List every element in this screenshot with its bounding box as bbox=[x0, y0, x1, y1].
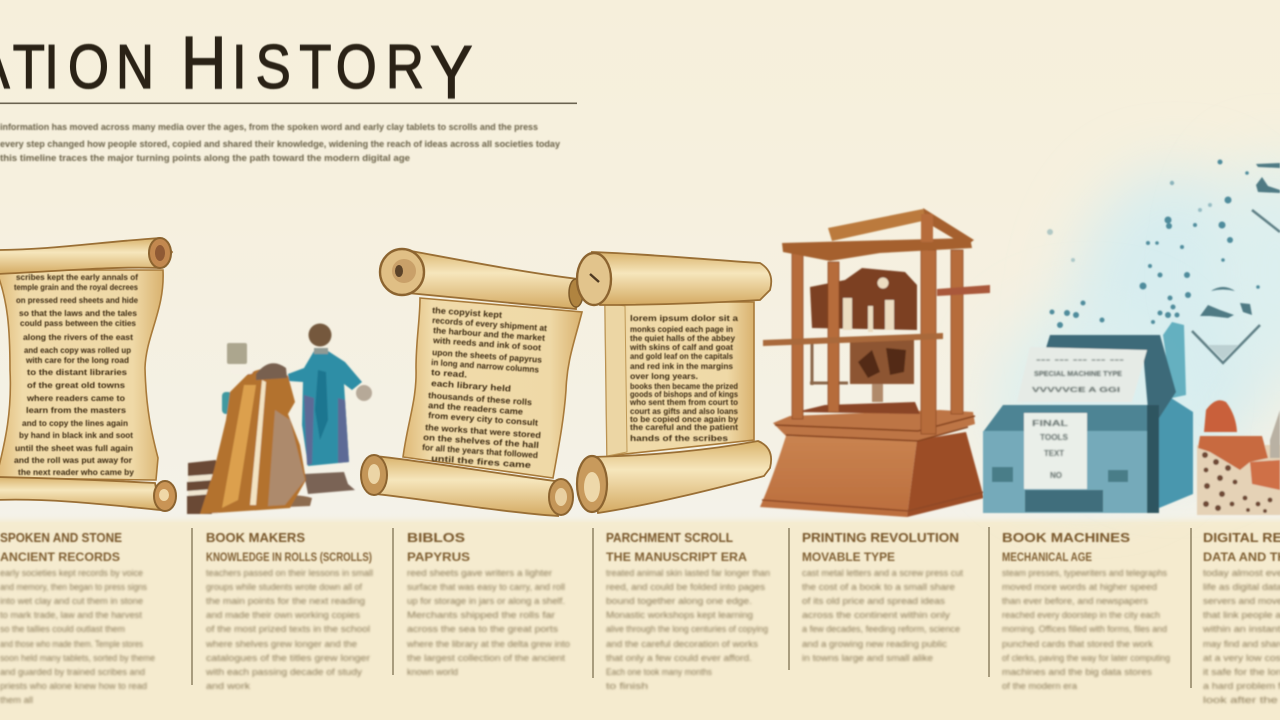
scroll 3 writing: the careful and the patient bbox=[630, 422, 738, 432]
crystal outline bbox=[1192, 325, 1260, 363]
crystal fill bbox=[1197, 326, 1258, 360]
crystal shape bbox=[1192, 287, 1260, 363]
column 2 bbox=[205, 530, 373, 691]
scroll 1 writing: to the distant libraries bbox=[27, 367, 127, 377]
title: N bbox=[116, 33, 154, 102]
scroll 3 writing: monks copied each page in bbox=[630, 324, 733, 334]
column 6 body: of the modern era bbox=[1002, 681, 1077, 691]
column 3 heading bbox=[407, 530, 470, 564]
column 3 body: known world bbox=[407, 667, 458, 677]
press cross bars bbox=[763, 333, 943, 346]
column 5 body: in towns large and small alike bbox=[802, 653, 933, 663]
scroll 3 top roll end bbox=[577, 253, 611, 305]
scroll 3 top roll bbox=[592, 252, 771, 305]
column 1 heading bbox=[0, 530, 122, 564]
column 7 bbox=[1202, 530, 1280, 705]
column 2 heading: BOOK MAKERS bbox=[206, 530, 305, 545]
column 3 body: surface that was easy to carry, and roll bbox=[407, 582, 565, 592]
scroll 1 writing: learn from the masters bbox=[26, 405, 126, 415]
title: T bbox=[13, 33, 45, 102]
scroll 3 writing: books then became the prized bbox=[630, 381, 738, 391]
column 5 body: across the continent within only bbox=[802, 610, 951, 620]
scroll 1 writing: with care for the long road bbox=[25, 355, 129, 365]
column 5 body: cast metal letters and a screw press cut bbox=[802, 568, 964, 578]
column 6 body: of clerks, paving the way for later computing bbox=[1002, 653, 1170, 663]
scroll 2 writing: thousands of these rolls bbox=[428, 390, 533, 407]
column 1 body: to mark trade, law and the harvest bbox=[0, 610, 143, 620]
column 3 bbox=[406, 530, 570, 677]
subtitle text: this timeline traces the major turning points along the path toward the modern digital age bbox=[0, 153, 410, 163]
column 6 heading: MECHANICAL AGE bbox=[1002, 550, 1092, 564]
printing press bbox=[760, 208, 990, 517]
column 1 body: priests who alone knew how to read bbox=[0, 681, 147, 691]
scroll 2 writing: the harbour and the market bbox=[433, 325, 545, 343]
scroll 2 top roll right end bbox=[569, 279, 583, 307]
column 6 body: machines and the big data stores bbox=[1002, 667, 1153, 677]
column 2 body: with each passing decade of study bbox=[205, 667, 363, 677]
title rule bbox=[0, 102, 577, 104]
grey object bbox=[1270, 410, 1280, 458]
press mechanism lower bbox=[850, 338, 914, 384]
title: H bbox=[181, 21, 226, 104]
column 6 body: punched cards that stored the work bbox=[1002, 639, 1154, 649]
upper crystal shape bbox=[1252, 163, 1280, 232]
machine note text: FINAL bbox=[1032, 419, 1068, 428]
machine paper text bbox=[1032, 355, 1125, 394]
scroll 2 bottom roll left end bbox=[361, 455, 387, 495]
title: I bbox=[232, 33, 247, 102]
column 5 body bbox=[802, 568, 964, 663]
column 4 body: bound together along one edge. bbox=[606, 596, 752, 606]
column 2 body: groups while students wrote down all of bbox=[206, 582, 362, 592]
scroll 1 sheet bbox=[0, 270, 163, 480]
column 4 bbox=[606, 530, 770, 691]
machine note text bbox=[1032, 419, 1069, 480]
scroll 3 bottom roll bbox=[590, 441, 771, 513]
brick and tablet stack bbox=[1197, 400, 1280, 515]
scroll 3 writing: goods of bishops and of kings bbox=[630, 389, 738, 399]
scroll 3 writing: to be copied once again by bbox=[630, 414, 738, 424]
column 7 heading bbox=[1203, 530, 1280, 564]
column 5 heading bbox=[802, 530, 959, 564]
scroll 2 writing bbox=[422, 305, 547, 470]
scroll 1 writing: temple grain and the royal decrees bbox=[14, 282, 138, 292]
column 3 body: Merchants shipped the rolls far bbox=[407, 610, 555, 620]
column 3 body: where the library at the delta grew into bbox=[406, 639, 570, 649]
scroll 1 writing: scribes kept the early annals of bbox=[16, 272, 138, 282]
machine cover bbox=[1046, 335, 1176, 432]
column 6 body: moved more words at higher speed bbox=[1002, 582, 1157, 592]
column 5 body: a few decades, feeding reform, science bbox=[802, 624, 960, 634]
scroll 1 writing: along the rivers of the east bbox=[23, 332, 133, 342]
machine note text: TOOLS bbox=[1040, 433, 1069, 442]
column 4 body bbox=[606, 568, 770, 691]
scroll 1 writing: on pressed reed sheets and hide bbox=[16, 295, 138, 305]
scroll 3 bottom roll end bbox=[577, 456, 607, 512]
title: O bbox=[336, 33, 377, 102]
title: T bbox=[299, 33, 331, 102]
scroll 1 writing: the next reader who came by bbox=[18, 467, 134, 477]
column divider 5 bbox=[988, 527, 990, 677]
press base side bbox=[907, 432, 984, 517]
column divider 4 bbox=[788, 528, 790, 670]
column 2 body: and work bbox=[206, 681, 251, 691]
robe folds bbox=[268, 410, 305, 506]
books pile bbox=[187, 460, 218, 514]
column 4 body: reed, and could be folded into pages bbox=[606, 582, 766, 592]
column 5 heading: PRINTING REVOLUTION bbox=[802, 530, 959, 545]
teacher collar bbox=[314, 348, 328, 354]
subtitle text: information has moved across many media over the ages, from the spoken word and early clay tablets to scrolls and the press bbox=[0, 122, 538, 132]
column 1 body bbox=[0, 568, 155, 705]
teal strap bbox=[222, 392, 232, 414]
machine front pillar bbox=[1025, 490, 1103, 512]
scroll 3 writing bbox=[629, 313, 738, 443]
column divider 1 bbox=[191, 528, 193, 685]
scroll 2 bottom roll right end bbox=[549, 479, 573, 515]
press base front bbox=[760, 436, 917, 517]
scroll 3 writing: the quiet halls of the abbey bbox=[630, 333, 735, 343]
column 1 body: early societies kept records by voice bbox=[0, 568, 143, 578]
scroll 2 writing: upon the sheets of papyrus bbox=[432, 347, 543, 365]
machine spray bbox=[1163, 322, 1186, 398]
press floor bbox=[796, 402, 920, 414]
column 3 body: reed sheets gave writers a lighter bbox=[407, 568, 552, 578]
scroll 3 writing: court as gifts and also loans bbox=[630, 406, 738, 416]
title: Y bbox=[430, 30, 473, 114]
scroll 1 writing: and each copy was rolled up bbox=[24, 345, 131, 355]
scroll 3 fold bbox=[605, 303, 627, 456]
column 2 heading: KNOWLEDGE IN ROLLS (SCROLLS) bbox=[206, 550, 372, 564]
column 4 body: to finish bbox=[606, 681, 648, 691]
scroll 1 writing: so that the laws and the tales bbox=[19, 308, 137, 318]
column 5 body: the cost of a book to a small share bbox=[802, 582, 955, 592]
column 4 body: and the careful decoration of works bbox=[606, 639, 759, 649]
robe shading bbox=[304, 395, 349, 465]
column 5 body: and a growing new reading public bbox=[802, 639, 948, 649]
blue splatter bbox=[1047, 160, 1260, 328]
column 3 body: the largest collection of the ancient bbox=[407, 653, 566, 663]
red clay lump bbox=[1204, 400, 1237, 432]
scroll 3 writing: and red ink in the margins bbox=[630, 361, 733, 371]
column 6 body: steam presses, typewriters and telegraphs bbox=[1002, 568, 1167, 578]
scroll 2 writing: for all the years that followed bbox=[422, 442, 538, 460]
column 2 body: of the most prized texts in the school bbox=[206, 624, 370, 634]
scroll 1 bottom roll bbox=[0, 477, 160, 510]
column 3 body bbox=[406, 568, 570, 677]
scroll 2 writing: each library held bbox=[431, 378, 511, 394]
press mechanism upper bbox=[810, 268, 917, 330]
machine paper bbox=[1017, 347, 1147, 402]
scroll 2 writing: records of every shipment at bbox=[432, 315, 547, 333]
scroll 2 bottom roll bbox=[375, 456, 558, 516]
column 1 body: them all bbox=[0, 695, 33, 705]
scroll 1 writing: and the roll was put away for bbox=[14, 455, 133, 465]
lower red brick bbox=[1250, 460, 1280, 490]
press posts bbox=[792, 250, 963, 434]
column 2 body bbox=[205, 568, 373, 691]
column 7 body bbox=[1202, 568, 1280, 705]
column 6 body bbox=[1002, 568, 1170, 691]
machine paper text: --- --- --- --- --- bbox=[1036, 355, 1125, 364]
scroll 1 bottom roll end bbox=[154, 481, 176, 511]
column 1 body: soon held many tablets, sorted by theme bbox=[0, 653, 155, 663]
teacher head bbox=[308, 324, 332, 346]
column 4 heading: THE MANUSCRIPT ERA bbox=[606, 550, 747, 564]
figures: scribe and teacher bbox=[187, 324, 372, 514]
scroll 1 writing: could pass between the cities bbox=[20, 318, 136, 328]
machine slots bbox=[992, 467, 1013, 482]
column divider 3 bbox=[592, 528, 594, 678]
robe highlight bbox=[222, 385, 256, 508]
scroll 2 top roll bbox=[400, 249, 578, 309]
machine right side bbox=[1147, 396, 1193, 513]
press top beams bbox=[782, 238, 972, 261]
speckled block bbox=[1197, 445, 1280, 515]
title: R bbox=[386, 33, 424, 102]
scroll 2 writing: with reeds and ink of soot bbox=[432, 335, 541, 353]
scroll 2 bbox=[361, 249, 583, 516]
column 1 bbox=[0, 530, 155, 705]
column divider 6 bbox=[1190, 528, 1192, 688]
column 1 body: and those who made them. Temple stores bbox=[0, 639, 143, 649]
column 4 heading bbox=[606, 530, 747, 564]
scroll 2 writing: from every city to consult bbox=[428, 410, 538, 428]
column 6 heading bbox=[1002, 530, 1130, 564]
scroll 3 writing: over long years. bbox=[630, 371, 698, 381]
scribe head bbox=[256, 363, 287, 380]
column 2 body: catalogues of the titles grew longer bbox=[206, 653, 370, 663]
column 6 heading: BOOK MACHINES bbox=[1002, 530, 1130, 545]
scroll 2 top roll left end bbox=[380, 249, 424, 295]
scroll 2 writing: the copyist kept bbox=[432, 305, 503, 320]
column 6 bbox=[1002, 530, 1170, 691]
scroll 3 writing: who sent them from court to bbox=[629, 397, 738, 407]
column 3 body: across the sea to the great ports bbox=[407, 624, 559, 634]
scroll 1 top roll bbox=[0, 238, 172, 274]
scroll 3 sheet bbox=[605, 302, 754, 456]
title bbox=[0, 21, 473, 114]
machine note bbox=[1024, 413, 1087, 489]
subtitle text: every step changed how people stored, copied and shared their knowledge, widening the reach of ideas across all societies today bbox=[0, 139, 560, 149]
subtitle text bbox=[0, 122, 560, 163]
scroll 3 writing: lorem ipsum dolor sit a bbox=[630, 313, 738, 323]
machine note text: NO bbox=[1050, 471, 1062, 480]
scroll 2 sheet bbox=[403, 298, 582, 478]
column 3 heading: BIBLOS bbox=[407, 530, 465, 545]
column 4 body: alive through the long centuries of copying bbox=[606, 624, 768, 634]
column 4 heading: PARCHMENT SCROLL bbox=[606, 530, 733, 545]
red brick bbox=[1198, 436, 1268, 470]
scroll 1 writing: of the great old towns bbox=[27, 380, 125, 390]
column 4 body: treated animal skin lasted far longer than bbox=[606, 568, 770, 578]
small sign bbox=[227, 343, 247, 364]
press side rods bbox=[810, 340, 848, 385]
scroll 2 writing: and the readers came bbox=[428, 400, 524, 417]
teacher hand plate bbox=[356, 385, 372, 401]
title: O bbox=[68, 33, 109, 102]
column 1 body: into wet clay and cut them in stone bbox=[0, 596, 143, 606]
column divider 2 bbox=[392, 528, 394, 675]
column 5 body: of its old price and spread ideas bbox=[802, 596, 946, 606]
scroll 1 top roll end bbox=[149, 238, 171, 268]
scroll 2 writing: the works that were stored bbox=[425, 422, 541, 440]
column 3 body: up for storage in jars or along a shelf. bbox=[407, 596, 565, 606]
column 1 heading: SPOKEN AND STONE bbox=[0, 530, 122, 545]
scroll 1 writing bbox=[14, 272, 138, 477]
scribe collar bbox=[231, 367, 253, 374]
crystal marks bbox=[1200, 287, 1252, 318]
scroll 3 bbox=[577, 252, 771, 513]
machine note text: TEXT bbox=[1044, 449, 1064, 458]
column 2 body: the main points for the next reading bbox=[206, 596, 365, 606]
scroll 1 writing: until the sheet was full again bbox=[15, 443, 133, 453]
teacher robe bbox=[288, 351, 362, 466]
column 2 body: teachers passed on their lessons in small bbox=[206, 568, 373, 578]
scroll 1 writing: and to copy the lines again bbox=[22, 418, 128, 428]
seated scribe robe bbox=[200, 368, 306, 514]
column 5 heading: MOVABLE TYPE bbox=[802, 550, 895, 564]
column 6 body: than ever before, and newspapers bbox=[1002, 596, 1149, 606]
scroll 2 writing: until the fires came bbox=[431, 453, 532, 470]
column 6 body: reached every doorstep in the city each bbox=[1002, 610, 1160, 620]
blue machine bbox=[983, 322, 1193, 513]
scroll 1 writing: where readers came to bbox=[26, 393, 125, 403]
title: S bbox=[256, 33, 291, 102]
column 1 body: and memory, then began to press signs bbox=[0, 582, 147, 592]
scroll 2 writing: to read. bbox=[431, 367, 467, 380]
scroll 2 writing: on the shelves of the hall bbox=[423, 432, 539, 450]
column 2 body: where shelves grew longer and the bbox=[205, 639, 357, 649]
column 2 body: and made their own working copies bbox=[206, 610, 361, 620]
scroll 3 writing: with skins of calf and goat bbox=[629, 342, 733, 352]
press stem bbox=[872, 384, 883, 402]
column 4 body: Each one took many months bbox=[606, 667, 712, 677]
scroll 2 writing: in long and narrow columns bbox=[431, 357, 540, 375]
title: I bbox=[44, 33, 59, 102]
scroll 1 bbox=[0, 238, 176, 511]
teacher base bbox=[304, 472, 355, 494]
machine paper text: VVVVVCE A GGI bbox=[1032, 385, 1120, 394]
floor mound bbox=[262, 496, 312, 508]
column 1 body: so the tallies could outlast them bbox=[0, 624, 125, 634]
column 1 body: and guarded by trained scribes and bbox=[0, 667, 145, 677]
column 5 bbox=[802, 530, 964, 663]
column 1 heading: ANCIENT RECORDS bbox=[0, 550, 120, 564]
column 4 body: Monastic workshops kept learning bbox=[606, 610, 753, 620]
machine paper text: SPECIAL MACHINE TYPE bbox=[1034, 369, 1122, 378]
scroll 3 writing: and gold leaf on the capitals bbox=[630, 351, 733, 361]
column 2 heading bbox=[206, 530, 372, 564]
scroll 3 writing: hands of the scribes bbox=[630, 433, 728, 443]
machine body bbox=[983, 405, 1147, 432]
column 6 body: morning. Offices filled with forms, files and bbox=[1002, 624, 1167, 634]
scroll 1 writing: by hand in black ink and soot bbox=[19, 430, 133, 440]
press base cap bbox=[773, 410, 975, 441]
press base foot line bbox=[762, 492, 984, 511]
column 4 body: that only a few could ever afford. bbox=[606, 653, 752, 663]
column 3 heading: PAPYRUS bbox=[407, 550, 470, 564]
